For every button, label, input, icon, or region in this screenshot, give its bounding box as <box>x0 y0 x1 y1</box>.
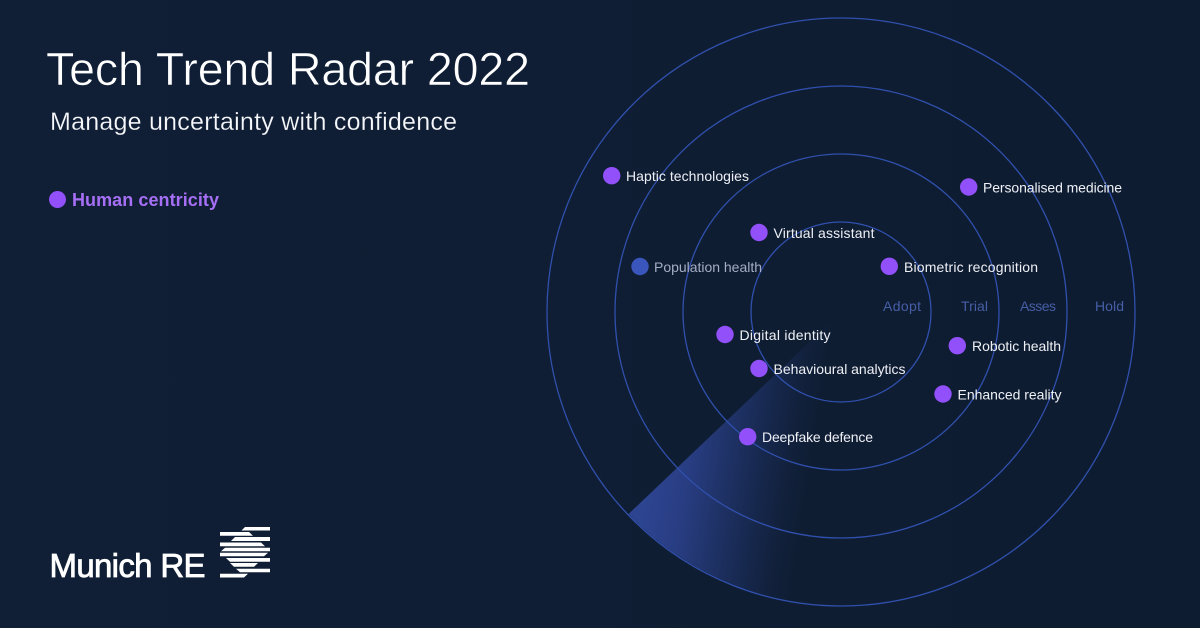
item: Robotic health: Robotic health <box>972 338 1061 354</box>
logo mark: stripes <box>220 527 270 578</box>
ring labels: Asses <box>1020 298 1056 314</box>
item: Virtual assistant: Virtual assistant <box>774 225 875 241</box>
ring labels <box>883 298 1124 314</box>
logo: Munich RE <box>50 527 270 584</box>
item: Behavioural analytics: Behavioural analytics <box>774 361 906 377</box>
item: Enhanced reality: Enhanced reality <box>958 386 1062 402</box>
item: Deepfake defence: Deepfake defence <box>762 429 873 445</box>
item: Haptic technologies: Haptic technologies <box>626 168 749 184</box>
legend: human centricity: Human centricity <box>72 190 219 210</box>
highlighted sector <box>628 312 841 606</box>
radar chart <box>547 18 1135 606</box>
ring labels: Trial <box>961 298 988 314</box>
subtitle: Manage uncertainty with confidence <box>50 108 457 136</box>
title: Tech Trend Radar 2022 <box>46 43 530 95</box>
radar rings <box>547 18 1135 606</box>
logo wordmark: Munich RE <box>50 547 206 584</box>
ring labels: Adopt <box>883 298 921 314</box>
item: Population health: Population health <box>654 259 762 275</box>
item: Digital identity: Digital identity <box>740 327 830 343</box>
ring labels: Hold <box>1095 298 1124 314</box>
item: Personalised medicine: Personalised medicine <box>983 180 1122 196</box>
item: Biometric recognition: Biometric recognition <box>904 259 1038 275</box>
